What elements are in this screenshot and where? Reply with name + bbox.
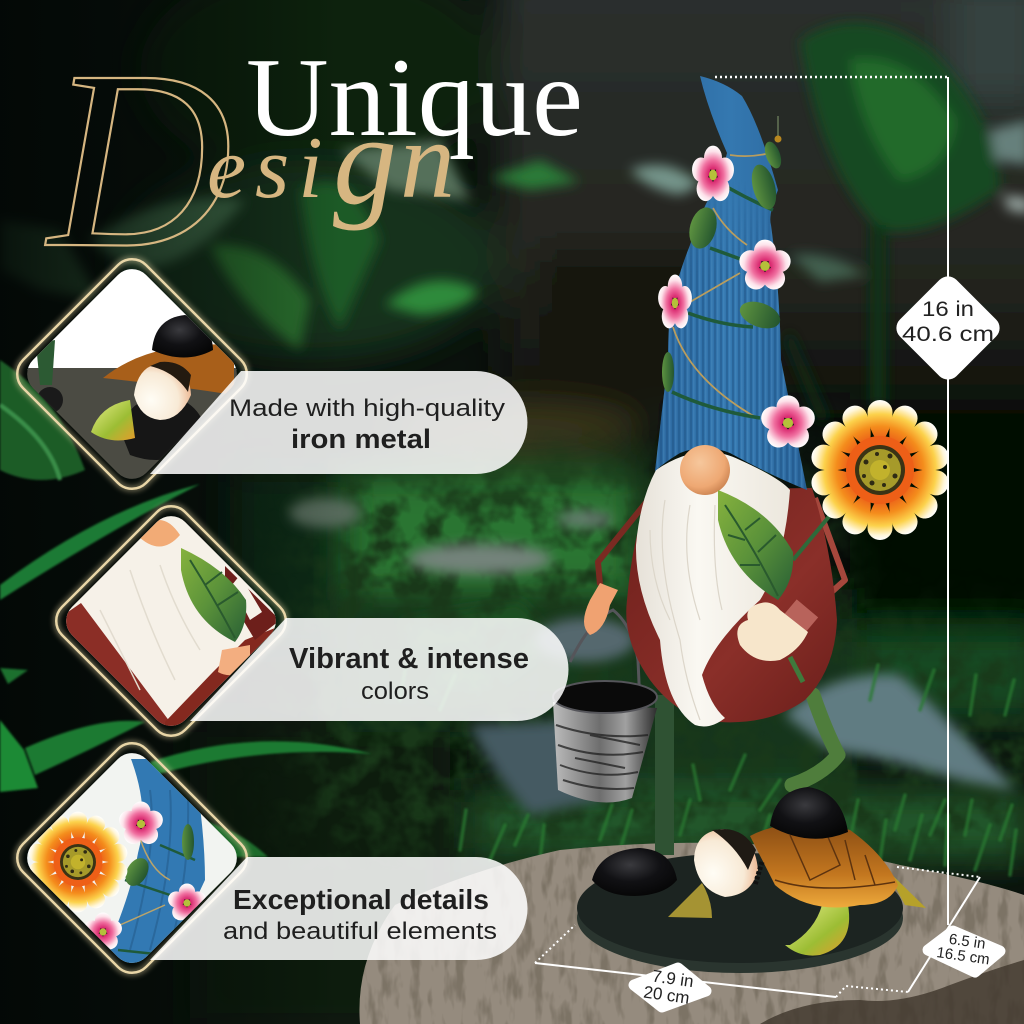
left hand [584, 583, 618, 635]
round base [577, 853, 903, 973]
diamond frame glow [9, 251, 255, 497]
dimension badge: height [891, 271, 1005, 385]
bee [774, 116, 782, 142]
caption: colors [361, 678, 429, 705]
caption [229, 395, 505, 454]
turtle antenna bee [755, 862, 762, 885]
detail photo: turtle [27, 269, 237, 479]
text pill [150, 371, 527, 474]
detail photo: hat and flowers [27, 753, 237, 963]
gnome figurine [553, 60, 951, 973]
right arm [806, 498, 845, 615]
foreground tropical leaves [0, 360, 372, 857]
dimension badge: width: 20 cm [642, 982, 691, 1008]
right handle [784, 599, 818, 633]
turtle [694, 787, 926, 956]
bucket [553, 681, 657, 802]
diamond frame [9, 251, 255, 497]
caption: Vibrant & intense [289, 643, 529, 675]
right leg [792, 695, 838, 785]
beard leaf [718, 490, 793, 600]
diamond frame [48, 498, 294, 744]
heading word: Design: esi [207, 120, 332, 217]
heading word: Unique: Unique [246, 36, 583, 160]
lower stem [790, 657, 803, 682]
turtle foot [785, 905, 849, 956]
diamond frame glow [48, 498, 294, 744]
dimension: height line [715, 77, 948, 925]
left leg [655, 695, 674, 855]
beard [636, 452, 790, 726]
nose [680, 445, 730, 495]
left arm [598, 500, 648, 585]
title: Unique Design [45, 19, 583, 301]
panel: iron metal [9, 251, 527, 497]
small leaf on base [668, 883, 712, 918]
heading word: Design: D [45, 19, 232, 301]
turtle shell [750, 824, 898, 908]
heading word: Design: g [333, 89, 397, 231]
heading word: Design: n [400, 99, 455, 221]
diamond frame glow [9, 735, 255, 981]
tree stump [350, 840, 1024, 1024]
panel: exceptional details [9, 735, 527, 981]
dimension badge: depth [928, 929, 1000, 972]
diamond frame [9, 735, 255, 981]
left boot [592, 848, 677, 896]
detail photo: beard and leaf [66, 516, 276, 726]
bucket handle [570, 610, 640, 705]
panel: vibrant colors [48, 498, 568, 744]
pink flowers on hat [656, 146, 818, 452]
dimension badge: height: 40.6 cm [902, 323, 994, 346]
caption: Exceptional details [233, 884, 489, 915]
flower stem [793, 513, 832, 560]
caption: Made with high-quality [229, 395, 505, 422]
hat [655, 76, 807, 490]
grass blades [400, 665, 1016, 875]
text pill [190, 618, 568, 721]
caption: and beautiful elements [223, 918, 497, 945]
dimension badge: width: 7.9 in [651, 967, 695, 991]
dimension badge: width [634, 966, 706, 1008]
dappled shade over ground [299, 456, 1024, 857]
turtle tail [885, 868, 926, 908]
caption [289, 643, 529, 705]
body [626, 488, 837, 722]
dimension: base width and depth lines [535, 867, 980, 997]
right hand [737, 602, 808, 661]
caption [223, 884, 497, 945]
text pill [150, 857, 528, 960]
dimension badge: depth: 6.5 in [948, 931, 987, 953]
dimension badge: height: 16 in [922, 298, 974, 321]
turtle head [694, 829, 758, 897]
dimension badge: depth: 16.5 cm [936, 944, 991, 968]
sunflower [809, 400, 951, 540]
turtle dome [770, 787, 848, 839]
vines on hat [672, 153, 773, 418]
caption: iron metal [291, 424, 431, 454]
hat leaves [662, 139, 784, 392]
